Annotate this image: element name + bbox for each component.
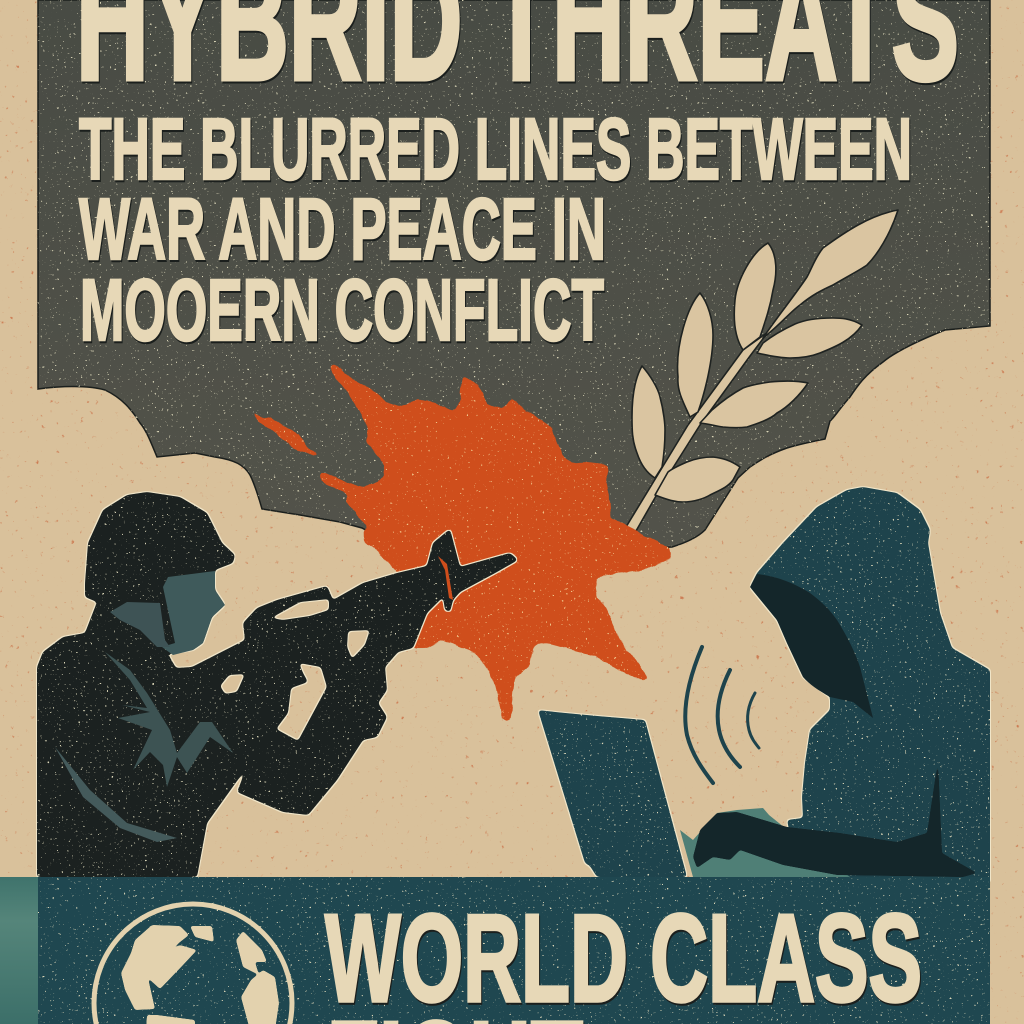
laptop: [538, 710, 687, 877]
bottom teal panel: [38, 877, 990, 1024]
soldier face: [162, 571, 225, 655]
icon: olive branch: [626, 210, 898, 531]
hooded figure: [750, 487, 990, 882]
icon: globe: [94, 904, 292, 1024]
subtitle: WAR AND PEACE IN: [79, 181, 606, 278]
paint splatter: [248, 363, 672, 720]
shoulder strap highlight: [55, 747, 177, 842]
chest highlight: [105, 652, 233, 787]
keyboard glow: [680, 808, 850, 877]
signal waves: [685, 647, 759, 783]
soldier neck patch: [110, 602, 170, 647]
hacker: [538, 487, 990, 882]
subtitle: MOOERN CONFLICT: [80, 262, 604, 359]
top dark panel with cloud edge: [38, 0, 990, 560]
soldier: [37, 492, 518, 877]
subtitle: [79, 101, 912, 359]
hacker arm: [693, 760, 977, 877]
soldier silhouette with rifle: [37, 492, 518, 877]
rifle sliver: [438, 556, 453, 600]
face shadow: [750, 574, 873, 718]
left teal strip: [0, 877, 38, 1024]
